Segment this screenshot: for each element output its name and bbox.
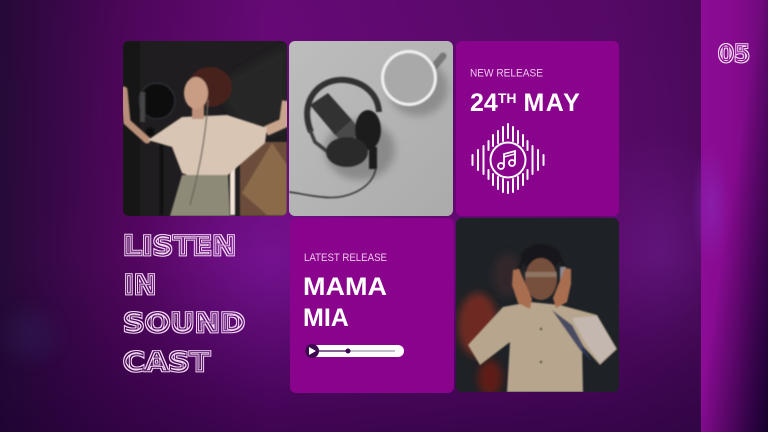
release date: TH (498, 90, 516, 106)
release date: 24 (470, 89, 498, 117)
title: CAST (123, 347, 211, 378)
title: SOUND (123, 308, 245, 339)
singer (124, 67, 287, 216)
photo: man with headphones (456, 218, 619, 396)
card: new release (456, 41, 619, 216)
track title: MIA (303, 304, 349, 332)
microphone (139, 83, 175, 215)
title: IN (124, 270, 156, 301)
release date: MAY (523, 89, 581, 117)
hands (512, 269, 532, 309)
track title: MAMA (303, 273, 387, 301)
card: latest release (290, 218, 454, 393)
head (518, 258, 566, 271)
light box (230, 142, 287, 216)
title: LISTEN (123, 229, 236, 262)
headphones (289, 80, 381, 198)
coffee cup (381, 50, 443, 106)
photo: headphones and coffee (289, 41, 453, 216)
icon: music sound wave (472, 124, 544, 193)
photo: singer in studio (123, 41, 287, 216)
label: new release: NEW RELEASE (470, 68, 543, 80)
shirt (468, 302, 617, 392)
label: latest release: LATEST RELEASE (304, 252, 387, 264)
title (123, 229, 245, 378)
right side band (691, 0, 768, 432)
audio player bar (305, 344, 404, 358)
page number: 05 (718, 40, 750, 68)
